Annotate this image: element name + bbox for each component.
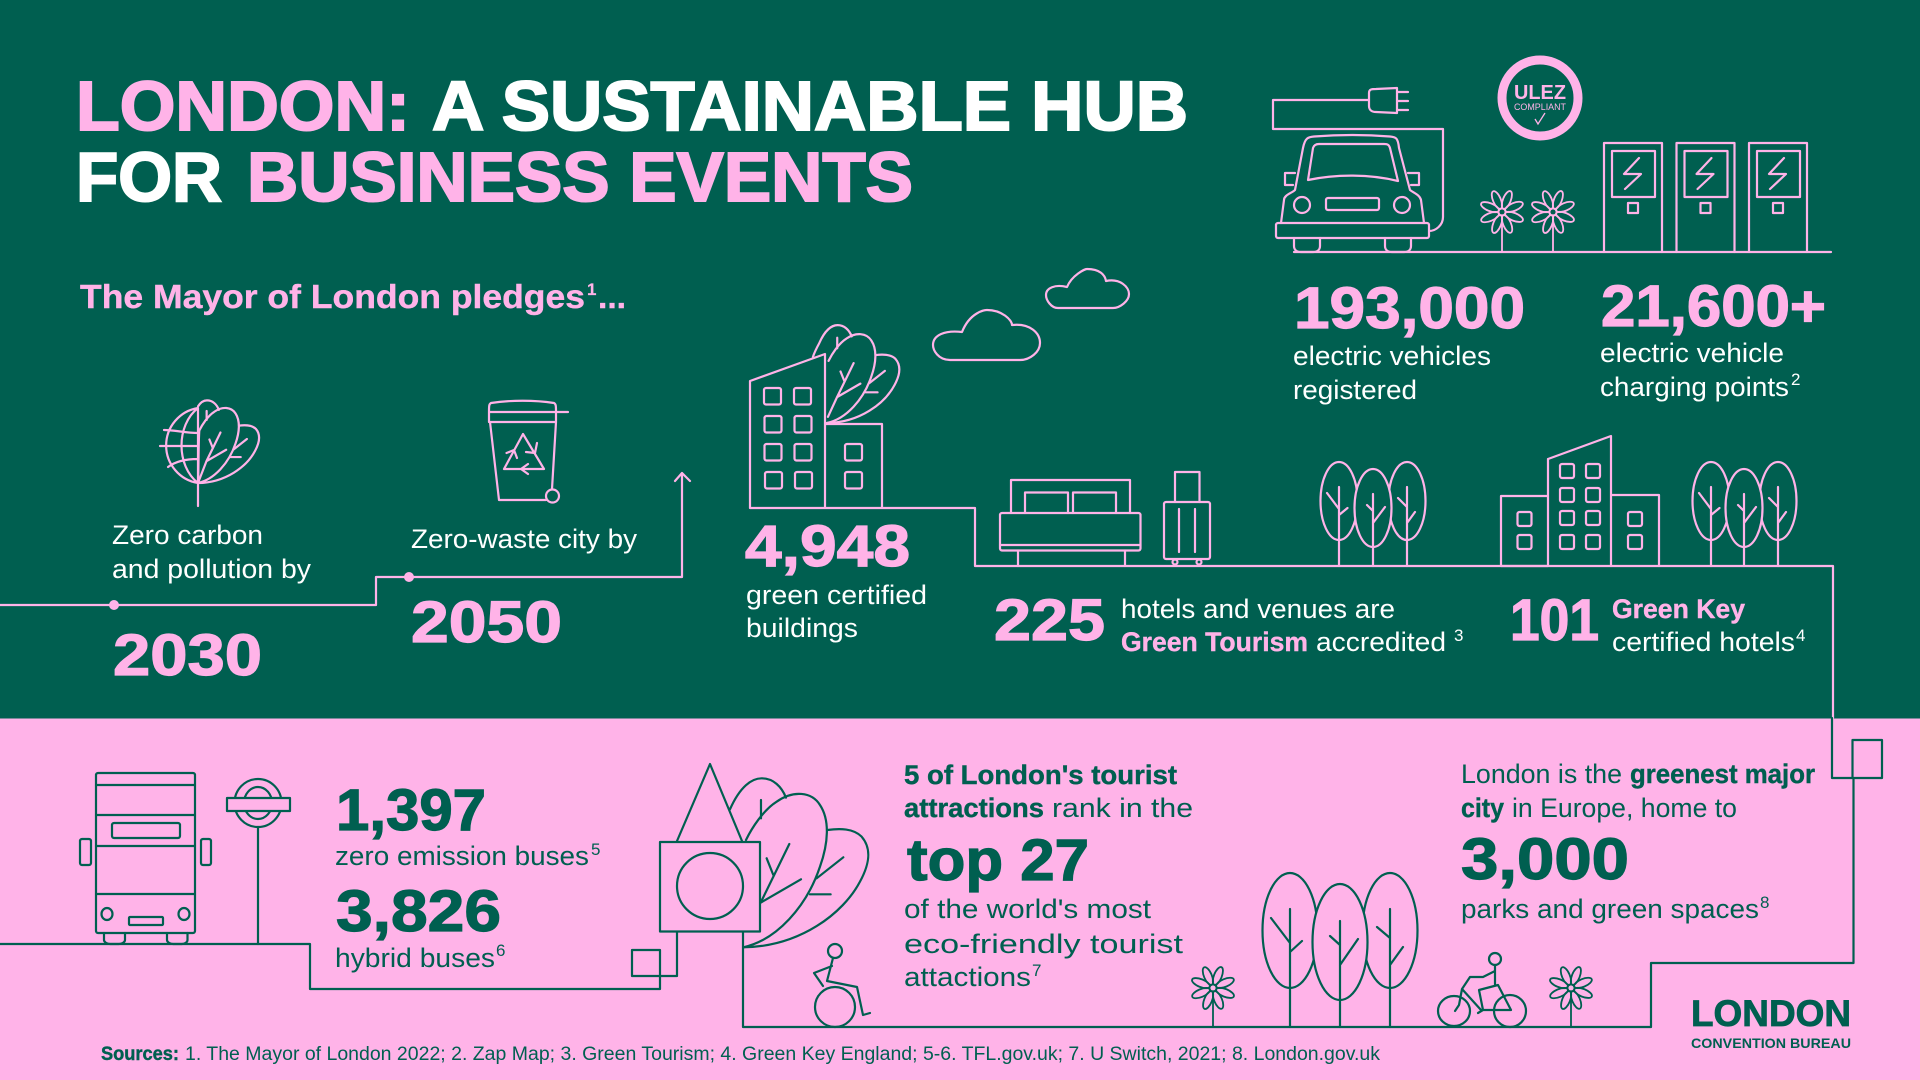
icon: trees group 2: [1692, 462, 1796, 566]
icon: green building with leaves: [750, 325, 1833, 718]
stat: 101 Green Key: certified hotels: [1612, 627, 1795, 657]
text: zero carbon: [112, 520, 312, 584]
icon: wheelchair user: [814, 944, 870, 1027]
stat: 101 Green Key: 101: [1510, 588, 1599, 653]
icon: ULEZ badge: ULEZ: [1514, 82, 1566, 104]
icon: electric car with cable: [1273, 88, 1443, 252]
icon: flower right: [1549, 966, 1593, 1027]
icon: recycling bin: [489, 401, 568, 502]
stat: 225 hotels: hotels and venues are: [1121, 594, 1395, 624]
stat: 21,600+ charging points: 21,600+: [1601, 274, 1826, 339]
stat: 193,000 electric vehicles: 193,000: [1294, 276, 1525, 341]
text: tourist attractions: of the world's most: [904, 894, 1152, 924]
stat: 225 hotels: 225: [994, 588, 1105, 653]
icon: charging stations: [1294, 143, 1831, 252]
stat: 193,000 electric vehicles: electric vehicles: [1293, 341, 1491, 371]
title: A SUSTAINABLE HUB: [432, 67, 1188, 145]
timeline line: pledges: [0, 473, 690, 610]
stat: zero emission buses: zero emission buses: [335, 841, 589, 871]
stat: 193,000 electric vehicles: [1293, 276, 1525, 405]
text: tourist attractions: [904, 760, 1193, 992]
icon: bed: [1000, 480, 1140, 566]
sources: 1. The Mayor of London 2022; 2. Zap Map; 3. Green Tourism; 4. Green Key England; 5-6. TFL.gov.uk; 7. U Switch, 2021; 8. London.gov.uk: [185, 1044, 1381, 1065]
stat: 21,600+ charging points: 2: [1791, 370, 1800, 389]
stat: 101 Green Key: 4: [1796, 626, 1805, 645]
panel: top green background: [0, 0, 1920, 719]
title: FOR: [76, 138, 222, 216]
text: tourist attractions: 7: [1032, 961, 1041, 980]
text: greenest major city: greenest major: [1630, 759, 1815, 789]
logo: London Convention Bureau: CONVENTION BUREAU: [1691, 1035, 1851, 1051]
stat: 225 hotels: Green Tourism: [1121, 627, 1308, 657]
icon: trees bottom: [1262, 873, 1418, 1027]
icon: ULEZ badge: COMPLIANT: [1514, 102, 1566, 112]
icon: globe leaf: [160, 400, 259, 506]
text: tourist attractions: attractions: [904, 793, 1044, 823]
icon: double decker bus: [80, 773, 211, 944]
stat: 21,600+ charging points: charging points: [1600, 372, 1789, 402]
text: tourist attractions: eco-friendly tourist: [904, 929, 1184, 959]
text: greenest major city: parks and green spaces: [1461, 894, 1759, 924]
stat: zero emission buses: 5: [591, 840, 600, 859]
number: 2030: 2030: [113, 623, 262, 688]
stat: hybrid buses: 6: [496, 941, 505, 960]
stat: 225 hotels: accredited: [1316, 627, 1446, 657]
text: green certified buildings: [746, 580, 927, 643]
logo: London Convention Bureau: LONDON: [1691, 993, 1851, 1034]
stat: zero emission buses: [335, 778, 600, 871]
heading: Mayor pledges: The Mayor of London pledges: [80, 278, 585, 315]
sources: Sources:: [101, 1044, 179, 1065]
text: tourist attractions: top 27: [907, 828, 1089, 893]
stat: hybrid buses: hybrid buses: [335, 943, 495, 973]
title: BUSINESS EVENTS: [247, 138, 913, 216]
text: greenest major city: [1461, 759, 1815, 924]
stat: zero emission buses: 1,397: [336, 778, 486, 843]
icon: city buildings: [1501, 436, 1659, 566]
number: 4,948: 4,948: [745, 514, 910, 579]
text: greenest major city: city: [1461, 793, 1504, 823]
text: zero carbon: and pollution by: [112, 554, 312, 584]
stat: 21,600+ charging points: electric vehicle: [1600, 338, 1784, 368]
stat: 225 hotels: 3: [1454, 626, 1463, 645]
title: [76, 67, 1188, 216]
text: zero waste: Zero-waste city by: [411, 524, 638, 554]
icon: ULEZ badge: [1502, 60, 1578, 136]
title: LONDON:: [76, 67, 410, 145]
stat: 21,600+ charging points: [1600, 274, 1826, 402]
text: tourist attractions: attactions: [904, 962, 1031, 992]
text: green certified buildings: buildings: [746, 613, 858, 643]
icon: cyclist: [1438, 953, 1526, 1027]
icon: trees group 1: [1320, 462, 1426, 566]
stat: hybrid buses: [335, 879, 505, 973]
icon: pink flowers: [1480, 190, 1575, 252]
text: tourist attractions: rank in the: [1052, 793, 1193, 823]
panel: bottom pink background: [0, 718, 1920, 1080]
heading: Mayor pledges: 1: [587, 280, 596, 299]
text: zero carbon: Zero carbon: [112, 520, 263, 550]
icon: flower left: [1191, 966, 1235, 1027]
stat: hybrid buses: 3,826: [336, 879, 501, 944]
icon: Big Ben and large leaves: [660, 764, 868, 947]
stat: 101 Green Key: Green Key: [1612, 594, 1745, 624]
text: greenest major city: 3,000: [1461, 827, 1629, 892]
icon: bus stop roundel: [227, 779, 290, 944]
connector line: bottom panel path: [0, 718, 1882, 1027]
stat: 225 hotels: [994, 588, 1463, 657]
icon: suitcase: [1164, 472, 1210, 564]
text: tourist attractions: 5 of London's tourist: [904, 760, 1177, 790]
text: green certified buildings: green certified: [746, 580, 927, 610]
stat: 193,000 electric vehicles: registered: [1293, 375, 1417, 405]
icon: clouds: [933, 269, 1129, 360]
text: greenest major city: London is the: [1461, 759, 1622, 789]
number: 2050: 2050: [411, 590, 562, 655]
heading: Mayor pledges: ...: [598, 278, 626, 315]
text: greenest major city: 8: [1760, 893, 1769, 912]
stat: 101 Green Key: [1510, 588, 1805, 657]
text: greenest major city: in Europe, home to: [1512, 793, 1737, 823]
